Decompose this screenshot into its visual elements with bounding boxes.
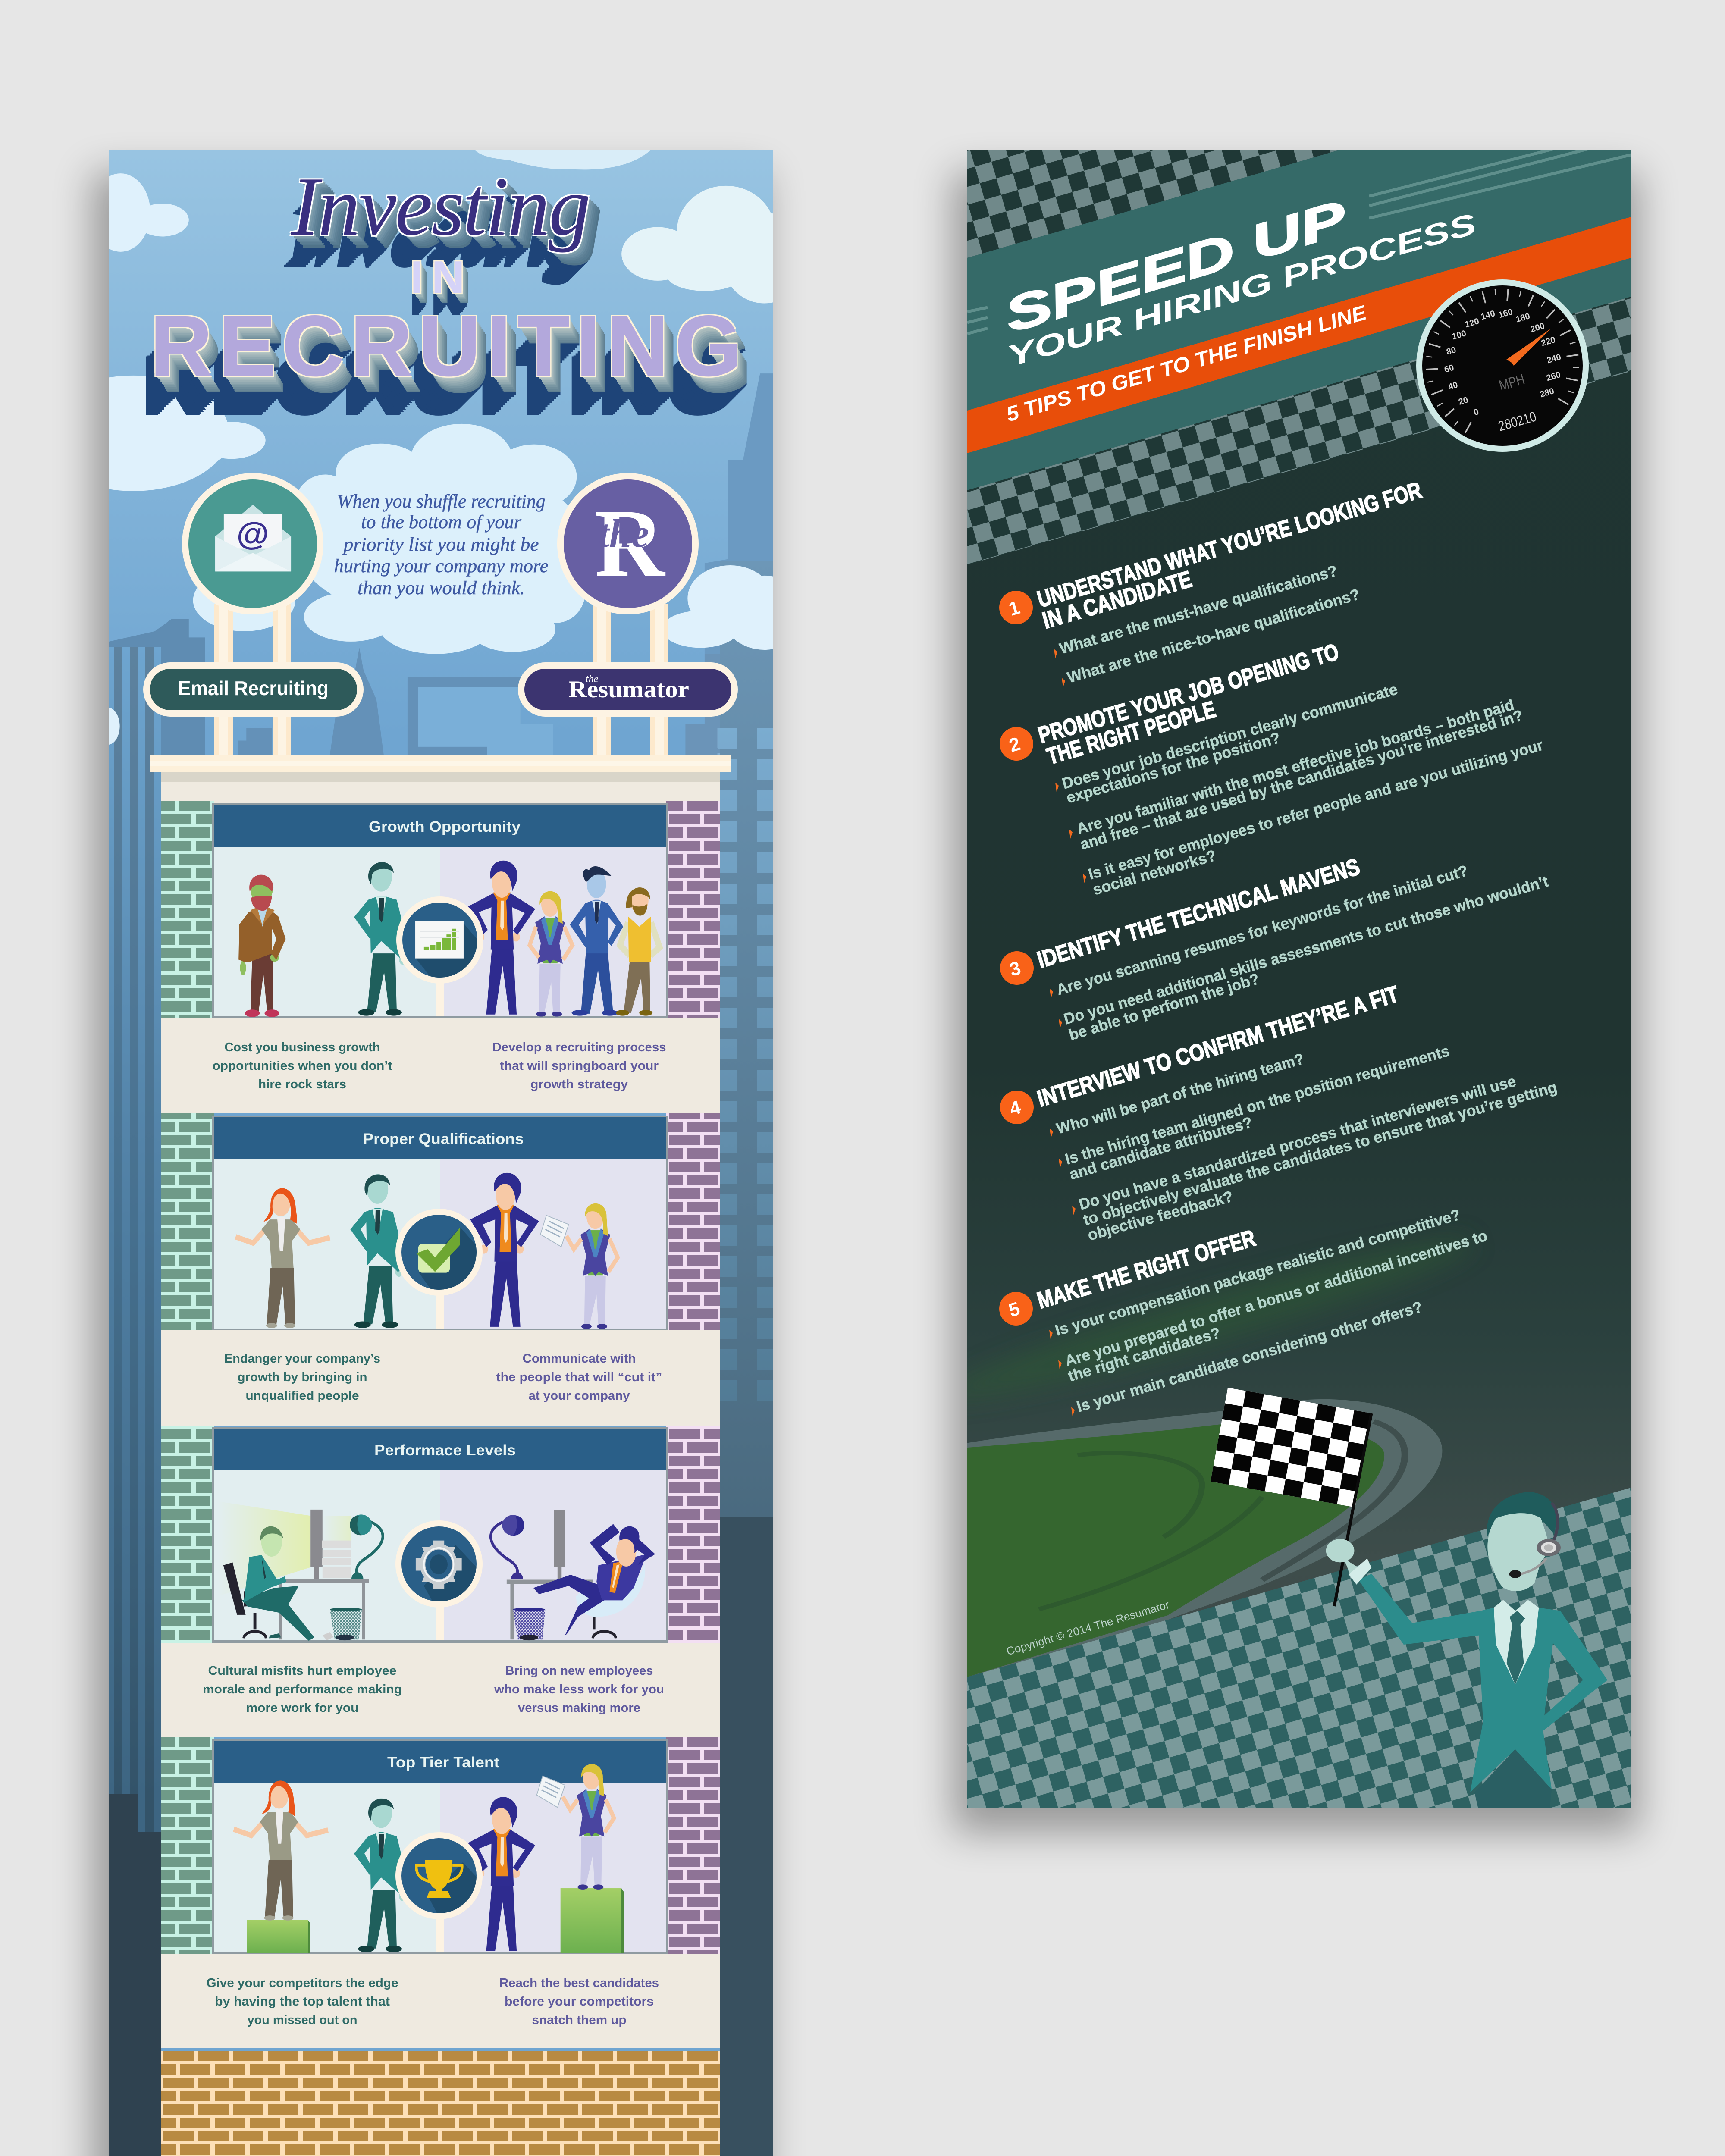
caption: top tier talent: snatch them up: [532, 2013, 626, 2027]
desk scene: relaxed: [491, 1510, 655, 1640]
characters: [238, 861, 660, 1017]
tip questions: Is the hiring team aligned on the position requirements: [1063, 1042, 1452, 1168]
caption: performance levels: versus making more: [518, 1701, 640, 1715]
icon: resumator logo circle: the: [598, 511, 649, 555]
caption: growth opportunity: hire rock stars: [258, 1078, 346, 1091]
caption: top tier talent: [161, 1954, 720, 2048]
sign: the resumator: [518, 473, 738, 755]
gauge numbers: 280: [1539, 386, 1555, 399]
number badge: [1000, 951, 1034, 985]
ledge: [150, 755, 731, 805]
gauge numbers: 220: [1540, 335, 1556, 348]
gauge numbers: 20: [1458, 395, 1469, 407]
tip questions: Is your main candidate considering other offers?: [1075, 1298, 1424, 1416]
tip questions: and candidate attributes?: [1067, 1113, 1255, 1183]
signpost badge: trophy: [395, 1832, 508, 1952]
bearded bad hire: [238, 875, 286, 1017]
caption: top tier talent: Reach the best candidates: [499, 1976, 659, 1990]
caption: performance levels: [161, 1643, 720, 1737]
caption: performance levels: who make less work for you: [494, 1683, 664, 1696]
tip questions: Are you prepared to offer a bonus or additional incentives to: [1063, 1226, 1489, 1370]
desk scene: overworked: [218, 1501, 383, 1641]
tip heading: THE RIGHT PEOPLE: [1044, 696, 1218, 770]
lawn glow behind tip 5: [936, 1221, 1479, 1418]
referee figure: [1326, 1492, 1607, 1811]
caption: growth opportunity: growth strategy: [530, 1078, 628, 1091]
label: email recruiting: [143, 662, 364, 717]
top checker band: [967, 150, 1339, 258]
tip questions: to objectively evaluate the candidates to ensure that you’re getting: [1081, 1078, 1559, 1229]
blonde: [530, 891, 572, 1017]
title: investing: Investing: [291, 160, 590, 253]
tip questions: social networks?: [1091, 846, 1218, 899]
number badge: [1000, 727, 1033, 761]
foreground dark buildings: [109, 1517, 773, 2156]
caption: top tier talent: you missed out on: [248, 2013, 357, 2027]
tip questions: [1049, 1206, 1489, 1416]
title: recruiting: RECRUITING: [151, 298, 748, 393]
intro paragraph: than you would think.: [358, 577, 525, 599]
tip heading: IDENTIFY THE TECHNICAL MAVENS: [1034, 854, 1363, 973]
tip heading: UNDERSTAND WHAT YOU’RE LOOKING FOR: [1035, 477, 1424, 613]
sky background: [109, 150, 773, 2156]
sign: email recruiting: [143, 473, 364, 755]
heading: Proper Qualifications: [363, 1131, 524, 1147]
tip heading: MAKE THE RIGHT OFFER: [1034, 1225, 1258, 1314]
good hire team: [467, 861, 535, 1015]
speed lines: [967, 147, 1631, 334]
tip questions: be able to perform the job?: [1066, 970, 1261, 1044]
caption: top tier talent: Give your competitors the edge: [206, 1976, 398, 1990]
caption: top tier talent: before your competitors: [505, 1995, 654, 2009]
tip questions: Is it easy for employees to refer people and are you utilizing your: [1086, 736, 1545, 883]
tip questions: Is your compensation package realistic and competitive?: [1053, 1206, 1462, 1339]
dark background: [967, 150, 1631, 1808]
brick columns: [161, 801, 720, 1956]
tip 1: [999, 477, 1424, 687]
right building with window strips: [718, 561, 773, 1522]
race track and lawn: [967, 1399, 1442, 1677]
panel: performance levels: [212, 1427, 668, 1643]
gauge ticks: [1426, 289, 1579, 433]
caption: proper qualifications: growth by bringing in: [237, 1370, 367, 1384]
caption: proper qualifications: at your company: [529, 1389, 630, 1403]
gauge numbers: 60: [1443, 363, 1455, 375]
label: the resumator: Resumator: [568, 676, 689, 703]
checkered flag: [1211, 1388, 1372, 1606]
consultant: [354, 862, 406, 1016]
left building stripes: [109, 647, 203, 1837]
number badge: [999, 591, 1033, 624]
blonde with resume: [540, 1203, 618, 1329]
icon: email circle: [182, 473, 323, 614]
bottom checker ground: [967, 1488, 1631, 1808]
panel: investing in recruiting: [109, 150, 773, 2156]
right podium: [561, 1888, 624, 1953]
caption: proper qualifications: unqualified people: [246, 1389, 359, 1403]
icon: resumator logo circle: R: [595, 489, 666, 597]
consultant: [354, 1799, 406, 1952]
caption: top tier talent: by having the top talent that: [215, 1995, 390, 2009]
tip questions: What are the nice-to-have qualifications?: [1065, 585, 1362, 686]
blue man: [570, 866, 623, 1016]
intro paragraph: [334, 491, 549, 599]
heading: [214, 805, 666, 847]
signpost badge: check: [395, 1209, 508, 1329]
panel: top tier talent: [212, 1739, 668, 1954]
intro paragraph: to the bottom of your: [361, 511, 522, 533]
intro paragraph: priority list you might be: [342, 534, 539, 555]
good hire: [467, 1797, 535, 1951]
heading: [214, 1429, 666, 1470]
tip questions: Are you familiar with the most effective job boards – both paid: [1075, 696, 1516, 838]
gauge numbers: 80: [1446, 345, 1457, 357]
orange band: [967, 217, 1631, 453]
heading: [214, 1741, 666, 1783]
tip questions: Do you need additional skills assessments to cut those who wouldn’t: [1062, 872, 1550, 1028]
characters on podiums: [234, 1764, 624, 1953]
number badge: 1: [1006, 597, 1022, 620]
label: email recruiting: Email Recruiting: [178, 677, 329, 699]
brick foundation: [161, 2051, 720, 2156]
clouds: [38, 150, 807, 745]
tip heading: PROMOTE YOUR JOB OPENING TO: [1035, 639, 1342, 749]
caption: proper qualifications: the people that will “cut it”: [496, 1370, 662, 1384]
redhead: [235, 1188, 330, 1328]
title: in: IN: [411, 252, 473, 303]
signpost badge: gear: [395, 1520, 508, 1640]
tip questions: Who will be part of the hiring team?: [1054, 1050, 1306, 1138]
tip questions: Does your job description clearly communicate: [1060, 680, 1399, 793]
title: your hiring process: YOUR HIRING PROCESS: [1004, 207, 1480, 373]
heading: [214, 1117, 666, 1159]
redhead: [234, 1780, 328, 1921]
blonde with resume: [537, 1764, 614, 1890]
mph label: MPH: [1497, 371, 1527, 394]
distant skyline: [109, 373, 773, 761]
heading: Top Tier Talent: [387, 1754, 499, 1771]
left podium: [247, 1920, 310, 1953]
gauge numbers: 0: [1473, 407, 1480, 417]
tip questions: expectations for the position?: [1064, 729, 1282, 807]
number badge: [1000, 1091, 1034, 1124]
tip 4: [1000, 981, 1559, 1244]
panel: speed up your hiring process: [936, 147, 1631, 1811]
gauge numbers: 240: [1546, 352, 1562, 365]
good hire: [470, 1173, 539, 1327]
tip questions: and free – that are used by the candidates you’re interested in?: [1078, 706, 1525, 853]
caption: performance levels: Bring on new employees: [505, 1664, 653, 1678]
lower checker band: [967, 297, 1631, 565]
tip questions: [1055, 680, 1545, 899]
heading: Growth Opportunity: [369, 818, 521, 835]
gauge numbers: 120: [1464, 317, 1480, 329]
gauge numbers: 200: [1529, 321, 1546, 334]
tip heading: [1035, 639, 1342, 770]
subtitle: 5 TIPS TO GET TO THE FINISH LINE: [1004, 301, 1370, 426]
label: the resumator: [518, 662, 738, 717]
heading: Performace Levels: [374, 1442, 516, 1459]
gauge numbers: 160: [1497, 307, 1514, 320]
caption: growth opportunity: Develop a recruiting process: [492, 1040, 666, 1054]
panel: proper qualifications: [212, 1116, 668, 1330]
caption: proper qualifications: Communicate with: [523, 1352, 636, 1366]
caption: performance levels: more work for you: [246, 1701, 359, 1715]
tip heading: INTERVIEW TO CONFIRM THEY’RE A FIT: [1034, 981, 1402, 1112]
gauge numbers: 100: [1451, 329, 1467, 342]
needle: [1506, 329, 1551, 366]
tip 2: [1000, 639, 1545, 899]
intro paragraph: When you shuffle recruiting: [337, 491, 545, 512]
number badge: 3: [1007, 957, 1023, 981]
number badge: 2: [1007, 733, 1023, 756]
label: the resumator: the: [586, 674, 599, 685]
speedometer: [1416, 279, 1589, 452]
tip questions: the right candidates?: [1066, 1324, 1223, 1385]
caption: proper qualifications: Endanger your company’s: [224, 1352, 380, 1366]
caption: growth opportunity: that will springboard your: [500, 1059, 659, 1073]
icon: email circle: @: [236, 516, 269, 552]
caption: growth opportunity: Cost you business growth: [224, 1040, 380, 1054]
number badge: 5: [1006, 1298, 1022, 1321]
consultant: [350, 1174, 403, 1328]
number badge: 4: [1007, 1097, 1023, 1120]
gauge numbers: [1443, 307, 1562, 417]
copyright: Copyright © 2014 The Resumator: [1005, 1598, 1171, 1658]
caption: performance levels: morale and performance making: [203, 1683, 402, 1696]
signpost badge: growth chart: [396, 896, 508, 1016]
tip 5: [999, 1206, 1489, 1416]
gauge numbers: 260: [1545, 370, 1562, 383]
tip heading: IN A CANDIDATE: [1040, 566, 1195, 634]
icon: resumator logo circle: [557, 473, 699, 614]
gauge numbers: 40: [1447, 380, 1459, 392]
teal header band: [967, 150, 1631, 490]
caption: proper qualifications: [161, 1330, 720, 1426]
tip questions: Do you have a standardized process that interviewers will use: [1077, 1072, 1518, 1213]
gauge numbers: 140: [1480, 309, 1496, 322]
hipster: [616, 887, 660, 1016]
tip 3: [1000, 854, 1550, 1044]
tip questions: What are the must-have qualifications?: [1057, 561, 1339, 658]
gauge numbers: 180: [1515, 311, 1531, 324]
characters: [235, 1173, 618, 1329]
caption: performance levels: Cultural misfits hurt employee: [208, 1664, 397, 1678]
caption: growth opportunity: opportunities when you don’t: [212, 1059, 392, 1073]
caption: growth opportunity: [161, 1018, 720, 1113]
title: speed up: SPEED UP: [998, 190, 1353, 342]
tip questions: Are you scanning resumes for keywords for the initial cut?: [1054, 862, 1470, 999]
intro paragraph: hurting your company more: [334, 555, 549, 577]
panel: growth opportunity: [212, 803, 668, 1018]
number badge: [999, 1292, 1033, 1326]
odometer: 280210: [1496, 408, 1538, 434]
tip heading: [1035, 477, 1424, 634]
tip questions: objective feedback?: [1085, 1187, 1235, 1244]
